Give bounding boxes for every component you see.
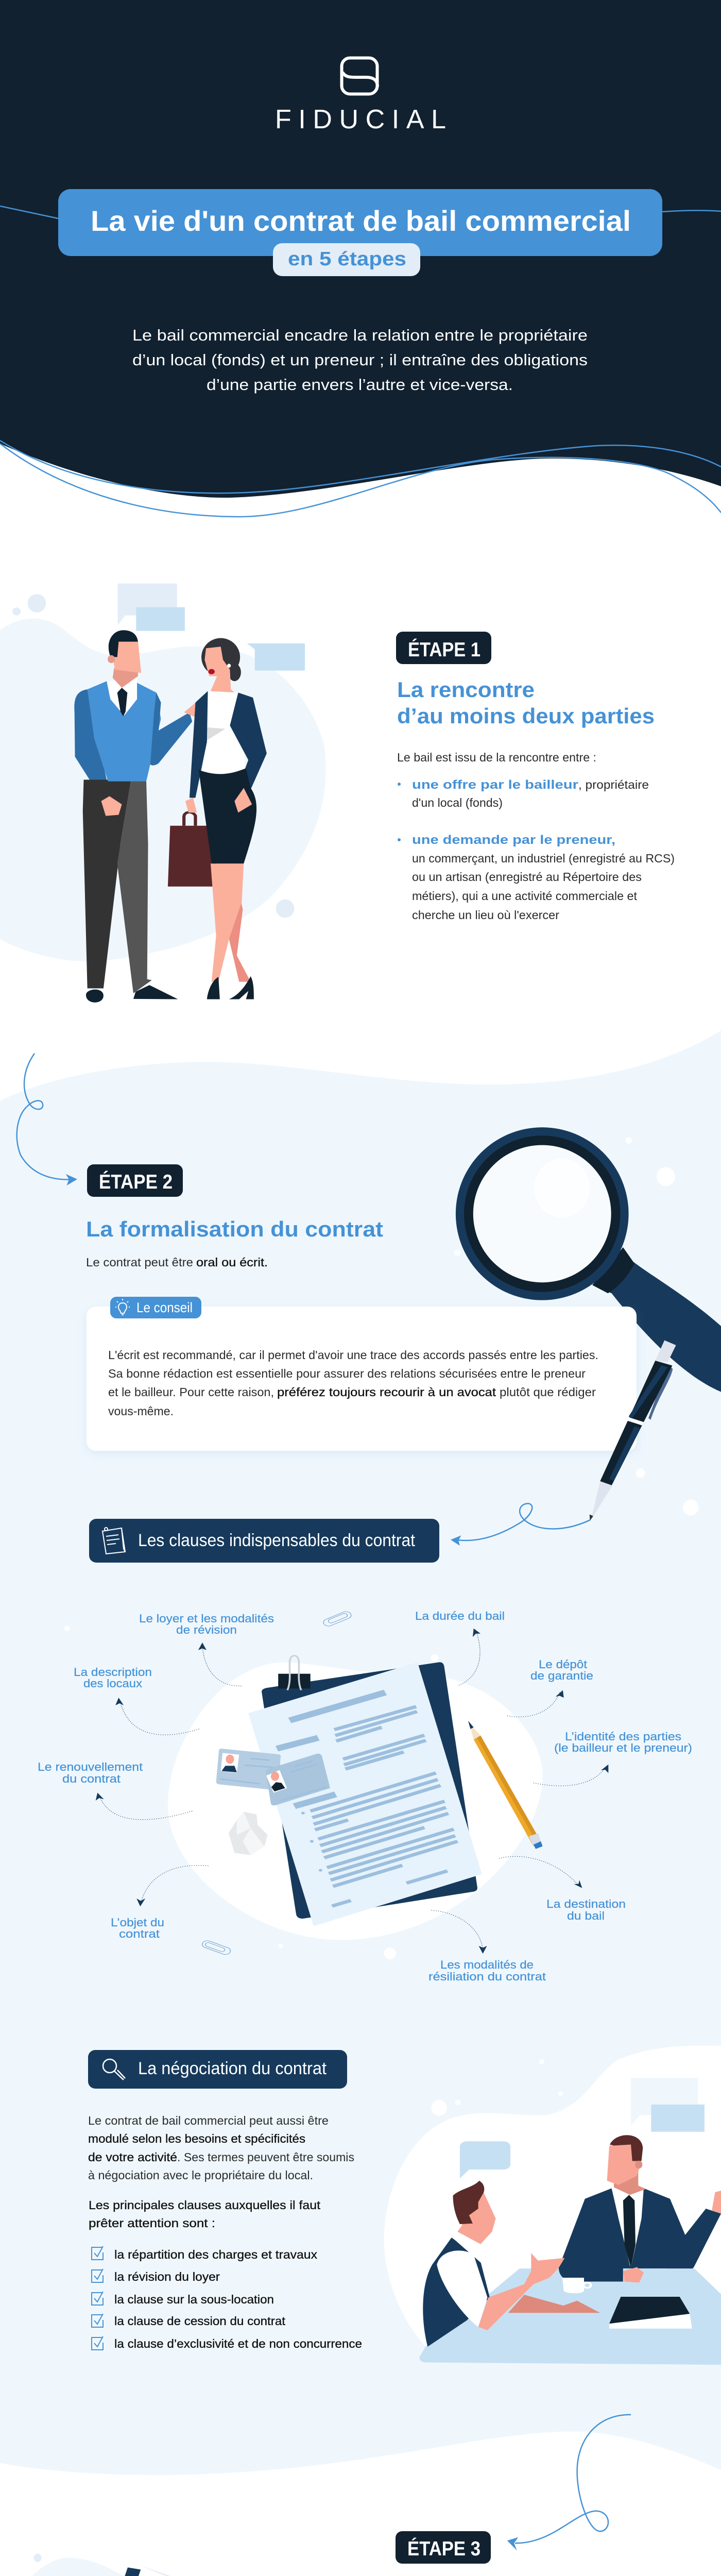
label: identité: L’identité des parties [565,1730,681,1743]
label: résiliation: Les modalités de [440,1958,534,1971]
title banner [58,189,662,256]
card: le conseil: et le bailleur. Pour cette raison, [108,1385,274,1399]
label: loyer [139,1612,274,1636]
label: dépôt: Le dépôt [539,1658,587,1671]
step 1 heading: d’au moins deux parties [397,704,655,728]
label: destination: La destination [546,1897,626,1910]
label: identité [554,1730,692,1754]
step 2 intro: Le contrat peut être [86,1256,193,1269]
label: identité: (le bailleur et le preneur) [554,1741,692,1754]
step 1 text [397,751,675,922]
step 1 text: ou un artisan (enregistré au Répertoire des [412,870,642,884]
step 1 text: un commerçant, un industriel (enregistré au RCS) [412,852,675,865]
title banner: La vie d'un contrat de bail commercial [91,205,631,237]
step 1 heading: La rencontre [397,677,535,702]
negotiation text: prêter attention sont : [89,2216,215,2230]
negotiation text: modulé selon les besoins et spécificités [88,2132,305,2145]
label: destination: du bail [567,1909,605,1922]
checklist: la répartition des charges et travaux [114,2248,318,2261]
step 2 badge: ÉTAPE 2 [99,1171,173,1193]
negotiation text: Le contrat de bail commercial peut aussi être [88,2114,329,2127]
step 2 intro: oral ou écrit. [196,1256,268,1269]
negotiation text: . Ses termes peuvent être soumis [177,2150,354,2164]
logo: Fiducial [275,58,446,134]
card: le conseil: plutôt que rédiger [500,1385,596,1399]
step 1 heading [397,677,655,728]
step 1 badge: ÉTAPE 1 [408,638,480,661]
step 1 badge [396,632,491,664]
card: le conseil [87,1297,637,1451]
label: objet: contrat [119,1927,160,1940]
label: dépôt: de garantie [530,1669,593,1682]
card: le conseil: préférez toujours recourir à un avocat [277,1385,496,1399]
checklist: la clause sur la sous-location [114,2293,274,2306]
intro paragraph: Le bail commercial encadre la relation entre le propriétaire [132,326,588,344]
checklist: la clause de cession du contrat [114,2314,286,2328]
illustration: magnifying glass [454,1127,721,1515]
intro paragraph [132,326,588,394]
subtitle pill: en 5 étapes [288,248,406,270]
panel: light blue background steps 2 [0,1030,721,2475]
label: loyer: Le loyer et les modalités [139,1612,274,1625]
label: résiliation: résiliation du contrat [428,1970,546,1983]
label: destination [546,1897,626,1922]
tag: le conseil: Le conseil [136,1300,193,1315]
illustration: clipboard and contract [64,1611,608,1959]
illustration: meeting [384,2046,721,2365]
label: loyer: de révision [176,1623,237,1636]
step 2 heading: La formalisation du contrat [86,1217,383,1241]
icon: magnifier [103,2059,125,2080]
label: renouvellement: Le renouvellement [38,1760,143,1773]
card: le conseil: Sa bonne rédaction est essentielle pour assurer des relations sécurisées entre le preneur [108,1367,586,1380]
intro paragraph: d’un local (fonds) et un preneur ; il entraîne des obligations [132,351,588,369]
step 1 text: une demande par le preneur, [412,833,615,847]
illustration: two people talking [0,584,326,1003]
chart: clauses diagram [38,1609,692,1983]
checklist: la clause d’exclusivité et de non concurrence [114,2337,362,2350]
label: objet [111,1916,164,1940]
step 1 text: une offre par le bailleur [412,778,578,792]
arrow: to step 3 [507,2415,631,2550]
negotiation text [88,2114,354,2230]
label: dépôt [530,1658,593,1682]
step 1 text: cherche un lieu où l'exercer [412,908,559,922]
step 1 text: métiers), qui a une activité commerciale et [412,889,638,903]
step 3 badge: ÉTAPE 3 [407,2537,480,2560]
intro paragraph: d’une partie envers l’autre et vice-versa. [207,376,513,394]
step 1 text: Le bail est issu de la rencontre entre : [397,751,596,764]
illustration: pen [451,1340,676,1546]
step 1 text: , propriétaire [578,778,649,791]
section bar: négociation: La négociation du contrat [138,2059,327,2078]
label: description: La description [74,1666,152,1679]
label: renouvellement: du contrat [62,1772,121,1785]
label: objet: L’objet du [111,1916,164,1929]
step 2 badge [87,1164,183,1197]
label: description [74,1666,152,1690]
panel: header [0,0,721,517]
negotiation text: de votre activité [88,2150,177,2164]
label: durée: La durée du bail [415,1609,505,1622]
section bar: clauses: Les clauses indispensables du contrat [138,1531,416,1550]
label: renouvellement [38,1760,143,1785]
tag: le conseil [110,1297,201,1318]
logo: Fiducial: FIDUCIAL [275,105,446,134]
arrow: to step 2 [17,1054,77,1185]
card: le conseil: L'écrit est recommandé, car il permet d'avoir une trace des accords passés entre les parties. [108,1348,598,1362]
step 1 text: d'un local (fonds) [412,796,503,809]
icon: document [102,1528,125,1554]
label: résiliation [428,1958,546,1983]
checklist [92,2246,362,2350]
step 3 badge [396,2531,491,2564]
section bar: négociation [88,2050,347,2089]
label: description: des locaux [83,1677,142,1690]
negotiation text: à négociation avec le propriétaire du local. [88,2168,313,2182]
section bar: clauses [89,1519,439,1563]
checklist: la révision du loyer [114,2270,220,2283]
illustration: folder, ruler, glasses and pen [0,2553,366,2576]
negotiation text: Les principales clauses auxquelles il faut [89,2198,321,2212]
subtitle pill [273,243,420,276]
step 2 intro [86,1256,268,1269]
card: le conseil: vous-même. [108,1404,174,1418]
